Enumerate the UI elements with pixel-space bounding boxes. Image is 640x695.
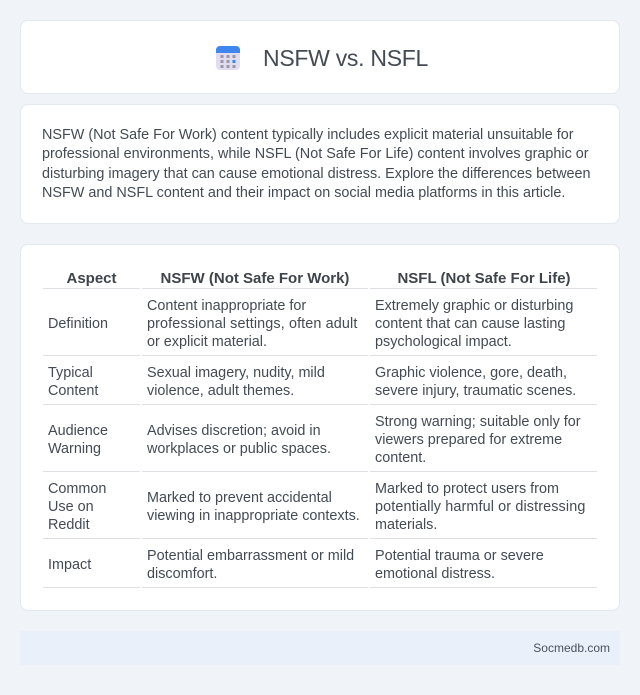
row: impact: Impact xyxy=(48,557,91,573)
intro text: disturbing imagery that can cause emotional distress. Explore the differences between xyxy=(42,166,590,182)
table card xyxy=(20,244,620,611)
row: impact: Potential trauma or severe xyxy=(375,548,544,564)
intro text: NSFW and NSFL content and their impact on social media platforms in this article. xyxy=(42,185,565,201)
table header xyxy=(66,270,571,286)
row: typical content xyxy=(48,365,576,399)
row: common use on reddit: materials. xyxy=(375,517,437,533)
footer bar xyxy=(20,631,620,665)
footer text: Socmedb.com xyxy=(533,641,610,655)
row: common use on reddit: viewing in inappropriate contexts. xyxy=(147,508,360,524)
row: definition: content that can cause lasting xyxy=(375,316,565,332)
row: impact: discomfort. xyxy=(147,566,217,582)
row: common use on reddit: potentially harmful or distressing xyxy=(375,499,585,515)
row: typical content: violence, adult themes. xyxy=(147,383,294,399)
row: impact xyxy=(48,548,544,582)
intro text: professional environments, while NSFL (Not Safe For Life) content involves graphic or xyxy=(42,146,589,162)
table header: NSFL (Not Safe For Life) xyxy=(397,270,571,286)
row: audience warning: Advises discretion; avoid in xyxy=(147,423,321,439)
table header: Aspect xyxy=(66,270,117,286)
row: audience warning: Audience xyxy=(48,423,108,439)
row: common use on reddit: Use on xyxy=(48,499,94,515)
row: typical content: severe injury, traumatic scenes. xyxy=(375,383,576,399)
row: common use on reddit: Marked to prevent accidental xyxy=(147,490,332,506)
row: audience warning: workplaces or public spaces. xyxy=(147,441,331,457)
row: audience warning: content. xyxy=(375,450,426,466)
row: impact: emotional distress. xyxy=(375,566,495,582)
row: definition: Extremely graphic or disturbing xyxy=(375,298,573,314)
table header: NSFW (Not Safe For Work) xyxy=(161,270,349,286)
row: definition: Definition xyxy=(48,316,108,332)
row: impact: Potential embarrassment or mild xyxy=(147,548,354,564)
row: audience warning xyxy=(48,414,581,466)
row: common use on reddit: Marked to protect users from xyxy=(375,481,559,497)
row: common use on reddit: Common xyxy=(48,481,106,497)
intro text xyxy=(42,127,590,201)
row: common use on reddit: Reddit xyxy=(48,517,90,533)
title card xyxy=(20,20,620,94)
intro card xyxy=(20,104,620,224)
row: definition: professional settings, often adult xyxy=(147,316,357,332)
icon: calendar xyxy=(216,46,240,70)
row: typical content: Content xyxy=(48,383,98,399)
row: audience warning: Strong warning; suitable only for xyxy=(375,414,581,430)
row: definition: Content inappropriate for xyxy=(147,298,306,314)
row: audience warning: viewers prepared for extreme xyxy=(375,432,562,448)
row: definition: or explicit material. xyxy=(147,334,267,350)
row: typical content: Sexual imagery, nudity, mild xyxy=(147,365,325,381)
row: common use on reddit xyxy=(48,481,585,533)
row: audience warning: Warning xyxy=(48,441,101,457)
intro text: NSFW (Not Safe For Work) content typically includes explicit material unsuitable for xyxy=(42,127,574,143)
title: NSFW vs. NSFL xyxy=(263,45,428,71)
row: typical content: Typical xyxy=(48,365,93,381)
row: definition: psychological impact. xyxy=(375,334,512,350)
row: typical content: Graphic violence, gore, death, xyxy=(375,365,567,381)
comparison table xyxy=(43,270,597,588)
row: definition xyxy=(48,298,573,350)
